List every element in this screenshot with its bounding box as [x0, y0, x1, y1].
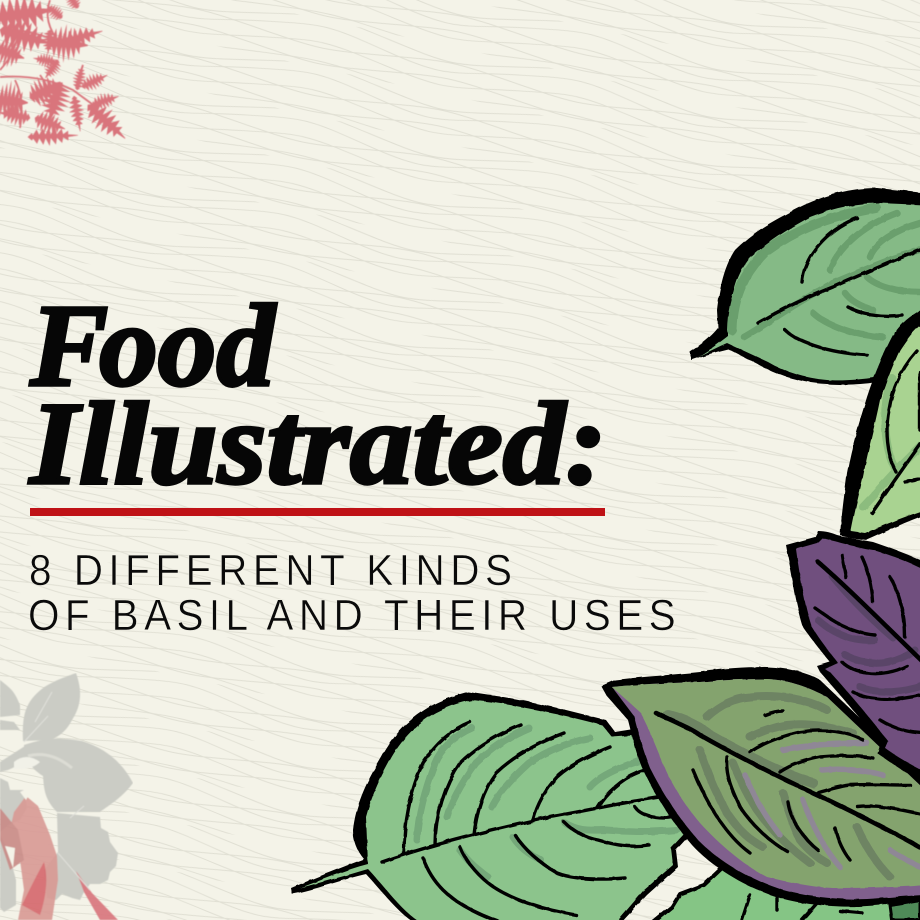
leaf: large lower left [291, 692, 700, 920]
decoration: grey leaves and red ribbon, bottom left [0, 673, 133, 920]
leaf: pale green [840, 308, 920, 540]
subtitle line 2: OF BASIL AND THEIR USES [28, 590, 676, 639]
subtitle [28, 545, 676, 639]
title line 2: Illustrated: [28, 378, 607, 509]
decoration: red fern, top left [0, 0, 133, 147]
illustration: basil leaves [291, 188, 920, 920]
leaf: bottom small green [650, 868, 920, 920]
leaf: green-purple [601, 667, 920, 907]
red divider rule [30, 508, 605, 516]
title line 1: Food [29, 280, 277, 411]
leaf: top green [690, 188, 920, 385]
subtitle line 1: 8 DIFFERENT KINDS [29, 545, 512, 594]
grey leaves [0, 673, 133, 912]
leaf: purple [786, 531, 920, 783]
red ribbon [0, 796, 118, 920]
title [28, 280, 607, 509]
